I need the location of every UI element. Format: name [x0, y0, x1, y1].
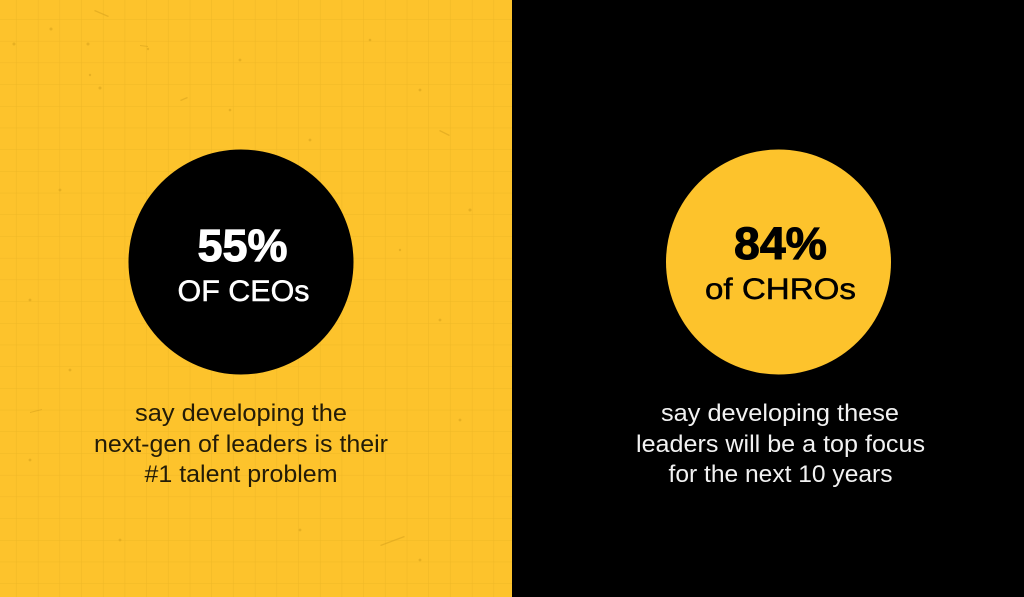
text block: CEO description: say developing the	[135, 400, 347, 427]
text block: CEO description: next-gen of leaders is their	[94, 431, 388, 458]
text block: CEO description: #1 talent problem	[144, 461, 338, 488]
circle: 55% of CEOs	[128, 150, 354, 374]
text block: CHRO description: leaders will be a top focus	[636, 431, 925, 458]
label: of CHROs: of CHROs	[705, 273, 856, 306]
circle: 84% of CHROs	[666, 150, 891, 374]
text block: CEO description	[94, 400, 388, 488]
panel: yellow CEO side	[0, 0, 512, 597]
stat: 55%: 55%	[198, 220, 288, 271]
label: OF CEOs: OF CEOs	[178, 275, 310, 308]
panel: black CHRO side	[512, 0, 1024, 597]
text block: CHRO description: say developing these	[661, 400, 899, 427]
text block: CHRO description: for the next 10 years	[668, 461, 892, 488]
stat: 84%: 84%	[734, 218, 827, 269]
text block: CHRO description	[636, 400, 925, 488]
